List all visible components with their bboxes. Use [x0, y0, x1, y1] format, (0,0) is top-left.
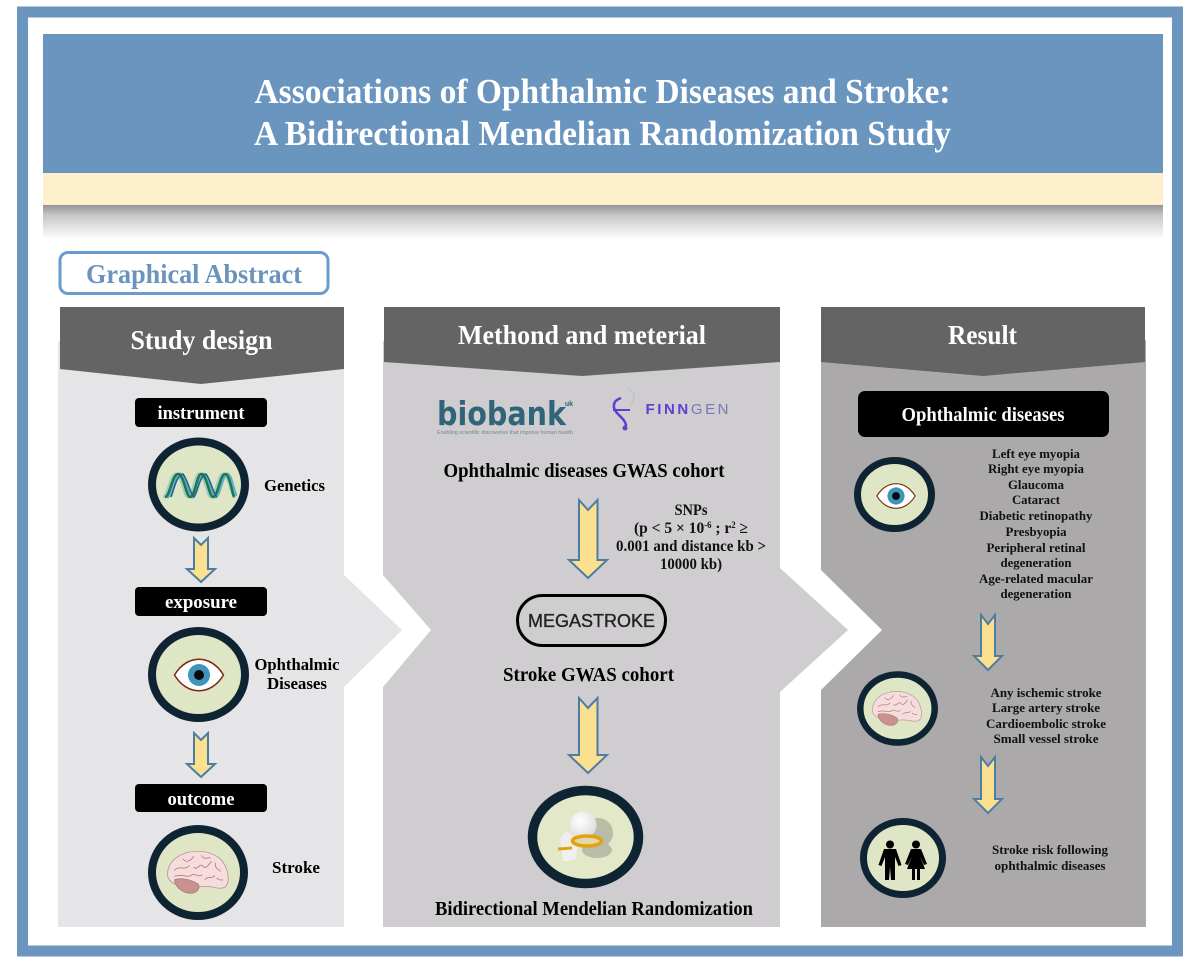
heading: graphical abstract: Graphical Abstract: [86, 259, 302, 289]
text: snps criteria: (p < 5 × 10: [634, 520, 706, 537]
list: ophthalmic diseases: Presbyopia: [1006, 524, 1067, 539]
label: exposure: exposure: [165, 592, 237, 613]
text: snps criteria: SNPs: [674, 502, 708, 519]
list: ophthalmic diseases: Peripheral retinal: [986, 540, 1086, 555]
text: snps criteria: [616, 502, 766, 573]
label: ophthalmic diseases: Diseases: [267, 674, 327, 693]
label: instrument: instrument: [158, 403, 245, 424]
arrow: [569, 500, 607, 578]
header: result: Result: [948, 320, 1017, 350]
logo: megastroke: [518, 596, 666, 646]
panel: result: [821, 307, 1146, 927]
text: snps criteria: 10000 kb): [660, 556, 722, 573]
label: outcome: outcome: [168, 789, 234, 810]
text: snps criteria: ; r: [711, 520, 731, 537]
label: ophthalmic diseases: [254, 655, 340, 693]
list: ophthalmic diseases: degeneration: [1000, 586, 1072, 601]
icon: dna: [152, 442, 245, 528]
header: method and material: [384, 307, 780, 376]
logo: finngen: [613, 388, 728, 430]
arrow: [974, 615, 1002, 670]
list: stroke subtypes: Small vessel stroke: [994, 731, 1099, 746]
list: stroke subtypes: Large artery stroke: [992, 700, 1100, 715]
list: ophthalmic diseases: Glaucoma: [1008, 477, 1064, 492]
icon: people: [864, 822, 942, 894]
logo: biobank: uk: [565, 401, 573, 408]
text: snps criteria: 0.001 and distance kb >: [616, 538, 766, 555]
header: study design: [60, 307, 344, 384]
label: ophthalmic diseases: Ophthalmic: [254, 655, 340, 674]
title banner: [43, 34, 1163, 239]
arrow: [187, 733, 215, 777]
label: ophthalmic diseases: Ophthalmic diseases: [902, 404, 1065, 426]
heading: bidirectional mendelian randomization: Bidirectional Mendelian Randomization: [435, 898, 753, 920]
header: method and material: Methond and meterial: [458, 320, 706, 350]
icon: researcher with magnifier: [532, 790, 638, 884]
arrow: [974, 757, 1002, 813]
logo: finngen: FINNGEN: [646, 401, 728, 418]
text: snps criteria: -6: [704, 520, 712, 530]
text: stroke risk: Stroke risk following: [992, 842, 1108, 857]
label: ophthalmic diseases: [858, 391, 1109, 437]
list: ophthalmic diseases: Age-related macular: [979, 571, 1093, 586]
label: stroke: Stroke: [272, 858, 320, 877]
label: genetics: Genetics: [264, 476, 325, 495]
heading: graphical abstract: [60, 252, 328, 294]
list: ophthalmic diseases: Left eye myopia: [992, 446, 1080, 461]
icon: brain: [860, 674, 935, 742]
icon: brain: [152, 829, 244, 916]
list: ophthalmic diseases: [979, 446, 1093, 601]
label: exposure: [135, 587, 267, 616]
label: outcome: [135, 784, 267, 812]
arrow: [569, 698, 607, 773]
header: study design: Study design: [130, 325, 272, 355]
panel: study design: [58, 307, 402, 927]
logo: biobank: Enabling scientific discoveries that improve human health: [437, 430, 573, 436]
text: stroke risk: [992, 842, 1108, 873]
list: ophthalmic diseases: Diabetic retinopathy: [980, 508, 1093, 523]
panel: method and material: [383, 307, 848, 927]
text: snps criteria: ≥: [736, 520, 748, 537]
label: instrument: [135, 398, 267, 427]
list: stroke subtypes: Cardioembolic stroke: [986, 716, 1106, 731]
title banner: Associations of Ophthalmic Diseases and Stroke:: [254, 72, 950, 111]
header: result: [821, 307, 1145, 376]
text: stroke risk: ophthalmic diseases: [994, 858, 1106, 873]
icon: eye: [858, 460, 932, 528]
heading: ophthalmic diseases gwas cohort: Ophthalmic diseases GWAS cohort: [444, 460, 725, 482]
text: snps criteria: 2: [731, 520, 736, 530]
arrow: [187, 538, 215, 582]
list: ophthalmic diseases: Cataract: [1012, 492, 1061, 507]
list: stroke subtypes: [986, 685, 1106, 746]
heading: stroke gwas cohort: Stroke GWAS cohort: [503, 664, 674, 686]
icon: eye: [152, 631, 245, 718]
list: ophthalmic diseases: Right eye myopia: [988, 461, 1084, 476]
title banner: A Bidirectional Mendelian Randomization Study: [254, 114, 951, 153]
logo: megastroke: MEGASTROKE: [528, 611, 655, 631]
logo: biobank: biobank: [437, 394, 567, 433]
list: ophthalmic diseases: degeneration: [1000, 555, 1072, 570]
list: stroke subtypes: Any ischemic stroke: [990, 685, 1102, 700]
